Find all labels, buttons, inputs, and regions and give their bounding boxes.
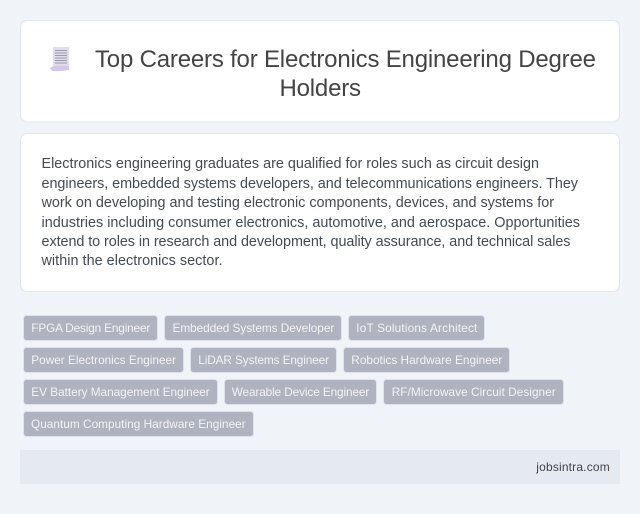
text block: description: Electronics engineering graduates are qualified for roles such as circuit design: [42, 156, 539, 172]
tag: Quantum Computing Hardware Engineer: [24, 412, 254, 436]
text block: description: extend to roles in research and development, quality assurance, and technical sales: [42, 234, 570, 250]
tag: LiDAR Systems Engineer: [190, 348, 336, 372]
tag: EV Battery Management Engineer: EV Battery Management Engineer: [31, 385, 210, 399]
text block: description: work on developing and testing electronic components, devices, and systems for: [40, 195, 554, 211]
tag: RF/Microwave Circuit Designer: [384, 380, 564, 404]
text block: description: within the electronics sector.: [40, 253, 222, 269]
tag: FPGA Design Engineer: [24, 316, 158, 340]
career tags: [24, 316, 564, 436]
tag: RF/Microwave Circuit Designer: RF/Microwave Circuit Designer: [392, 385, 556, 399]
footer bar: [20, 450, 620, 484]
tag: Wearable Device Engineer: [224, 380, 376, 404]
tag: Quantum Computing Hardware Engineer: Quantum Computing Hardware Engineer: [31, 417, 246, 431]
tag: IoT Solutions Architect: IoT Solutions Architect: [356, 321, 478, 335]
tag: Robotics Hardware Engineer: Robotics Hardware Engineer: [351, 353, 502, 367]
text block: description: [40, 156, 580, 269]
tag: LiDAR Systems Engineer: LiDAR Systems Engineer: [198, 353, 329, 367]
tag: Wearable Device Engineer: Wearable Device Engineer: [232, 385, 369, 399]
tag: Power Electronics Engineer: Power Electronics Engineer: [31, 353, 176, 367]
tag: Power Electronics Engineer: [24, 348, 184, 372]
footer source text: jobsintra.com: [535, 460, 610, 474]
tag: Embedded Systems Developer: [164, 316, 342, 340]
title: Holders: [280, 75, 361, 102]
tag: Robotics Hardware Engineer: [344, 348, 510, 372]
title: [95, 46, 596, 102]
tag: FPGA Design Engineer: FPGA Design Engineer: [31, 321, 150, 335]
tag: Embedded Systems Developer: Embedded Systems Developer: [172, 321, 334, 335]
text block: description: industries including consumer electronics, automotive, and aerospace. Opportunities: [42, 215, 580, 231]
tag: EV Battery Management Engineer: [24, 380, 218, 404]
icon: paper scroll: [50, 47, 69, 71]
title: Top Careers for Electronics Engineering Degree: [95, 46, 596, 73]
panel: description card: [20, 134, 620, 292]
tag: IoT Solutions Architect: [348, 316, 484, 340]
text block: description: engineers, embedded systems developers, and telecommunications engineers. They: [42, 176, 579, 192]
panel: header card: [20, 20, 620, 122]
